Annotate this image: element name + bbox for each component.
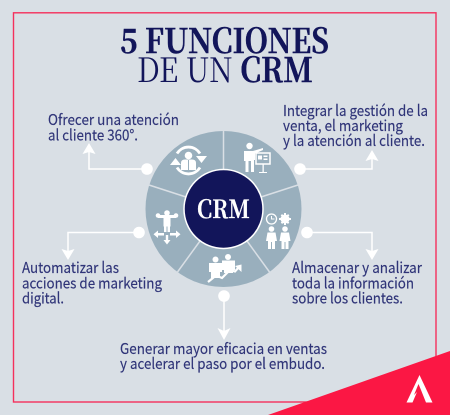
center circle — [184, 170, 263, 248]
text: automatizar: acciones de marketing — [22, 272, 162, 294]
connector: eficacia — [218, 290, 230, 340]
text: almacenar: sobre los clientes. — [292, 288, 403, 308]
text: atención 360: al cliente 360°. — [48, 124, 138, 146]
title — [120, 14, 329, 92]
text: eficacia — [120, 338, 327, 374]
text: atención 360: Ofrecer una atención — [48, 109, 179, 130]
text: almacenar: Almacenar y analizar — [292, 257, 422, 278]
text: eficacia: Generar mayor eficacia en ventas — [120, 338, 327, 359]
connector: automatizar — [62, 227, 145, 260]
text: atención 360 — [48, 109, 179, 146]
text: integrar: Integrar la gestión de la — [283, 100, 428, 121]
text: integrar: y la atención al cliente. — [283, 130, 425, 151]
title: 5 FUNCIONES — [120, 14, 329, 63]
icon: team and rising arrow — [208, 254, 242, 282]
text: automatizar: digital. — [22, 288, 64, 308]
center circle: CRM — [197, 190, 250, 226]
text: eficacia: y acelerar el paso por el embudo. — [120, 353, 325, 374]
connector: integrar — [294, 150, 378, 175]
icon: cycle with person — [170, 147, 207, 174]
icon: logo — [406, 375, 432, 402]
text: automatizar: Automatizar las — [22, 257, 119, 278]
text: integrar — [283, 100, 428, 151]
text: automatizar — [22, 257, 162, 308]
text: integrar: venta, el marketing — [283, 115, 403, 136]
icon: two people with clock and gear — [266, 213, 291, 249]
wheel — [146, 131, 302, 287]
connector: atención 360 — [82, 143, 153, 175]
text: almacenar — [292, 257, 422, 308]
icon: presenter with board — [244, 143, 270, 173]
icon: person with directional arrows — [154, 210, 180, 244]
red corner triangle — [268, 351, 450, 415]
text: almacenar: toda la información — [292, 272, 414, 294]
connector: almacenar — [301, 227, 378, 260]
title: DE UN CRM — [137, 43, 313, 92]
